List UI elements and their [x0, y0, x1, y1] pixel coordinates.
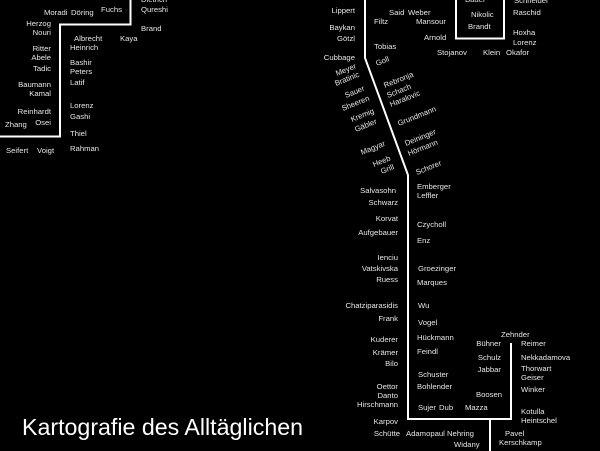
names: lower right: Jabbar — [477, 365, 501, 374]
names: central column, left: Hirschmann — [357, 400, 398, 409]
names: bottom row: Widany — [454, 440, 480, 449]
names: left cluster: Kamal — [29, 89, 51, 98]
names: left cluster: Baumann — [18, 80, 51, 89]
names: central column, left: Frank — [378, 314, 398, 323]
names: central column, right: Vogel — [418, 318, 438, 327]
names: central column, right: Sujer — [418, 403, 436, 412]
names: lower right: Schulz — [478, 353, 501, 362]
names: central column, left: Chatziparasidis — [345, 301, 398, 310]
names: top right box and neighbours: Raschid — [513, 8, 541, 17]
names: upper centre, right of line: Klein — [483, 48, 500, 57]
names: central column, right: Bohlender — [417, 382, 452, 391]
names: lower right: Thorwart — [521, 364, 552, 373]
names: left cluster: Albrecht — [74, 34, 103, 43]
names: upper centre, left of line: Bratinic — [333, 70, 361, 88]
names: left cluster: Lorenz — [70, 101, 94, 110]
names: upper centre, left of line: Meyer — [334, 61, 358, 78]
names: bottom row: Nehring — [447, 429, 474, 438]
names: central column, left: Oettor — [377, 382, 398, 391]
names: top right box and neighbours: Brandt — [468, 22, 492, 31]
names: central column, left: Salvasohn — [360, 186, 396, 195]
names: left cluster: Kaya — [120, 34, 138, 43]
names: upper centre, right of line: Deininger — [403, 127, 438, 148]
names: left cluster: Gashi — [70, 112, 90, 121]
names: upper centre, right of line: Said — [389, 8, 404, 17]
names: central column, left: Korvat — [376, 214, 399, 223]
names: left cluster: Nouri — [33, 28, 51, 37]
names: central column, right: Enz — [417, 236, 430, 245]
names: central column, right: Marques — [417, 278, 447, 287]
names: lower right: Heintschel — [521, 416, 557, 425]
names: upper centre, right of line: Hörmann — [406, 138, 439, 158]
names: lower right: Boosen — [476, 390, 502, 399]
names: central column, left: Vatskivska — [362, 264, 399, 273]
names: left cluster: Zhang — [5, 120, 27, 129]
names: central column, right: Leffler — [417, 191, 439, 200]
names: left cluster: Seifert — [6, 146, 29, 155]
names: upper centre, left of line: Lippert — [331, 6, 356, 15]
names: upper centre, right of line: Grundmann — [396, 104, 437, 128]
names: central column, left — [345, 186, 400, 438]
names: left cluster: Heinrich — [70, 43, 98, 52]
names: left cluster: Peters — [70, 67, 92, 76]
names: bottom row: Kerschkamp — [499, 438, 542, 447]
names: lower right: Zehnder — [501, 330, 530, 339]
names: upper centre, right of line: Weber — [408, 8, 431, 17]
names: upper centre, right of line: Okafor — [506, 48, 530, 57]
names: bottom row: Adamopaul — [406, 429, 445, 438]
names: central column, left: Kuderer — [371, 335, 398, 344]
names: lower right: Geiser — [521, 373, 544, 382]
names: central column, left: Aufgebauer — [358, 228, 398, 237]
names: left cluster: Abele — [31, 53, 51, 62]
names: central column, right: Emberger — [417, 182, 451, 191]
names: left cluster: Voigt — [37, 146, 55, 155]
names: upper centre, left of line: Götzl — [337, 34, 355, 43]
names: left cluster: Döring — [71, 8, 94, 17]
names: central column, right: Dub — [439, 403, 453, 412]
names: central column, left: Danto — [377, 391, 398, 400]
names: upper centre, left of line: Grill — [379, 162, 396, 176]
names: left cluster: Reinhardt — [18, 107, 52, 116]
names: left cluster: Rahman — [70, 144, 99, 153]
names: top right box and neighbours — [465, 0, 549, 47]
names: upper centre, right of line: Arnold — [424, 33, 446, 42]
names: left cluster: Osei — [35, 118, 51, 127]
names: upper centre, left of line — [324, 6, 396, 176]
names: central column, left: Schwarz — [369, 198, 398, 207]
names: left cluster: Bashir — [70, 58, 92, 67]
names: central column, right: Feindl — [417, 347, 438, 356]
names: upper centre, left of line: Gäbler — [353, 117, 379, 134]
names: upper centre, right of line: Haralovic — [388, 88, 422, 109]
names: left cluster — [5, 0, 168, 155]
names: central column, left: Ienciu — [377, 253, 398, 262]
names: central column, right: Wu — [418, 301, 429, 310]
names: top right box and neighbours: Lorenz — [513, 38, 537, 47]
names: upper centre, right of line: Mansour — [416, 17, 446, 26]
title: Kartografie des Alltäglichen — [22, 414, 303, 440]
names: upper centre, left of line: Kremig — [349, 106, 375, 124]
names: left cluster: Fuchs — [101, 5, 122, 14]
names: central column, left: Krämer — [373, 348, 398, 357]
names: central column, left: Ruess — [376, 275, 398, 284]
names: central column, left: Bilo — [385, 359, 398, 368]
names: central column, left: Schütte — [374, 429, 400, 438]
names: lower right: Bühner — [476, 339, 501, 348]
names: central column, right — [417, 182, 488, 412]
names: upper centre, left of line: Sauer — [343, 84, 366, 100]
names: upper centre, right of line: Rebronja — [382, 70, 415, 90]
names: top right box and neighbours: Nikolic — [471, 10, 494, 19]
names: upper centre, left of line: Heeb — [371, 154, 392, 169]
names: central column, right: Mazza — [465, 403, 488, 412]
names: top right box and neighbours: Hoxha — [513, 28, 536, 37]
names: lower right — [476, 330, 571, 425]
names: upper centre, right of line: Schorer — [414, 158, 443, 177]
names: upper centre, left of line: Magyar — [359, 139, 387, 157]
names: left cluster: Brand — [141, 24, 162, 33]
names: upper centre, right of line: Schach — [385, 82, 413, 100]
names: lower right: Winker — [521, 385, 545, 394]
names: upper centre, right of line: Goll — [374, 54, 391, 68]
names: bottom row: Pavel — [505, 429, 525, 438]
names: left cluster: Herzog — [26, 19, 51, 28]
names: upper centre, right of line: Stojanov — [437, 48, 467, 57]
names: left cluster: Qureshi — [141, 5, 168, 14]
names: upper centre, right of line: Tobias — [374, 42, 396, 51]
names: upper centre, right of line: Filtz — [374, 17, 388, 26]
names: bottom row — [406, 429, 542, 449]
names: central column, right: Hückmann — [417, 333, 454, 342]
names: left cluster: Tadic — [33, 64, 51, 73]
names: left cluster: Ritter — [33, 44, 51, 53]
names: lower right: Nekkadamova — [521, 353, 571, 362]
names: upper centre, left of line: Sheeren — [340, 94, 371, 113]
names: central column, right: Groezinger — [418, 264, 456, 273]
names: lower right: Reimer — [521, 339, 546, 348]
names: upper centre, left of line: Cubbage — [324, 53, 355, 62]
names: left cluster: Latif — [70, 78, 85, 87]
names: central column, right: Czycholl — [417, 220, 446, 229]
names: left cluster: Moradi — [44, 8, 68, 17]
names: central column, right: Schuster — [418, 370, 449, 379]
names: upper centre, left of line: Baykan — [329, 23, 355, 32]
names: left cluster: Thiel — [70, 129, 87, 138]
names: central column, left: Karpov — [374, 417, 398, 426]
names: upper centre, right of line — [374, 8, 530, 177]
names: lower right: Kotulla — [521, 407, 545, 416]
